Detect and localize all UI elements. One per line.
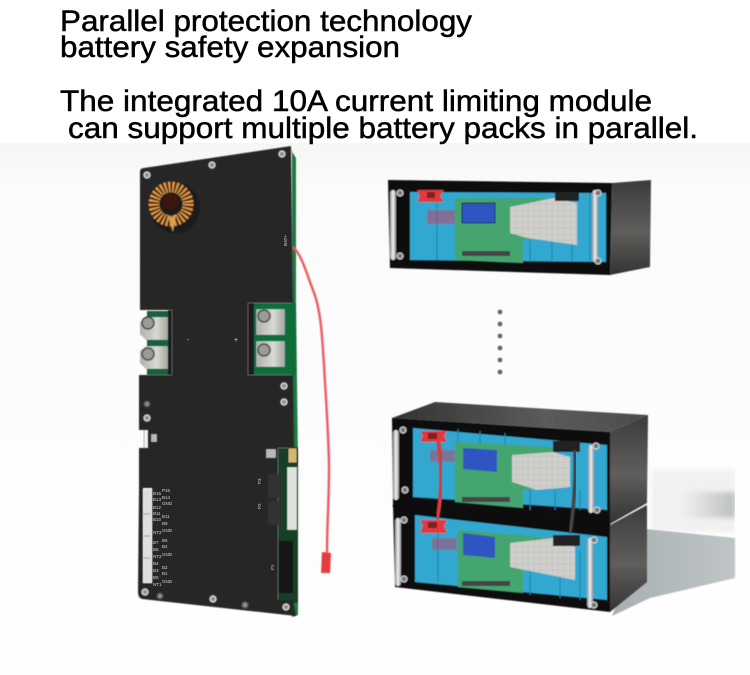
title: Parallel protection technology (60, 5, 472, 38)
small board labels: B7 (153, 540, 159, 545)
handles (393, 430, 399, 500)
power terminals (140, 309, 285, 369)
small board labels: P1 (270, 564, 275, 570)
black board cover (138, 146, 296, 616)
small board labels: B13 (153, 497, 162, 502)
red terminal (420, 520, 447, 533)
heatsink (510, 198, 577, 245)
small board labels: B14 (162, 495, 171, 500)
BMS circuit board (138, 146, 298, 617)
small board labels: GND (162, 579, 173, 584)
small board labels: NT2 (153, 530, 162, 535)
board green edge (147, 150, 298, 617)
blue cells (410, 192, 606, 262)
black terminal (555, 192, 579, 201)
small board labels: - (187, 337, 190, 344)
terminal strip (462, 251, 510, 256)
small board labels: B2 (162, 565, 168, 570)
green control board (455, 442, 553, 508)
upper battery pack (388, 180, 651, 275)
mounting screws (142, 151, 289, 610)
small board labels: B11 (162, 514, 170, 519)
small board labels: GND (162, 552, 173, 557)
small board labels: B9 (162, 521, 168, 526)
title (60, 5, 472, 64)
small board labels: B11 (153, 511, 161, 516)
side panel (610, 415, 648, 524)
LCD screen (463, 448, 497, 472)
red power cable (437, 441, 441, 519)
small board labels: B1 (162, 571, 168, 576)
blue cells (415, 515, 607, 600)
front frame (388, 180, 612, 275)
handles (395, 518, 401, 586)
handles (390, 190, 396, 260)
terminal strip (462, 497, 510, 502)
black power cable (570, 450, 575, 533)
photo background panel (0, 143, 750, 675)
green control board (458, 530, 553, 593)
small board labels: B4 (153, 561, 159, 566)
small board labels: B3 (153, 568, 159, 573)
small board labels: B6 (162, 538, 168, 543)
small board labels: B12 (153, 505, 162, 510)
red dashed parallel line (430, 198, 432, 430)
LCD screen (462, 203, 495, 223)
middle battery pack (392, 402, 648, 525)
title: battery safety expansion (60, 31, 400, 64)
small board labels: P2 (257, 503, 262, 509)
description: The integrated 10A current limiting module (60, 85, 652, 118)
parallel connection dots (498, 310, 502, 374)
heatsink (512, 452, 570, 490)
small board labels: NT1 (153, 582, 162, 587)
white balance connectors (143, 489, 152, 583)
small board labels: + (234, 337, 238, 344)
heatsink (510, 538, 575, 580)
top face (392, 402, 648, 432)
black terminal (553, 441, 580, 452)
red terminal (417, 190, 444, 202)
description: can support multiple battery packs in parallel. (68, 112, 698, 145)
small board labels: B15 (153, 491, 162, 496)
right side connectors (144, 430, 297, 593)
ground shadow (612, 470, 750, 616)
small board labels: P16 (162, 488, 171, 493)
side panel (610, 180, 651, 275)
small board labels: P3 (257, 478, 262, 484)
toroid inductor (150, 183, 200, 233)
small board labels: B0 (153, 575, 159, 580)
LCD screen (463, 533, 495, 558)
small board labels: GND (162, 528, 173, 533)
small board labels: NT2 (153, 554, 162, 559)
black terminal (553, 535, 580, 546)
small board labels: BAT+ (283, 235, 288, 246)
front frame (392, 418, 610, 525)
red wire with connector (293, 247, 331, 573)
lower battery pack (393, 505, 647, 612)
small board labels: B10 (153, 517, 162, 522)
black dashed parallel line (566, 190, 568, 432)
front frame (393, 505, 610, 612)
small board labels: B5 (153, 547, 159, 552)
blue cells (413, 428, 607, 510)
small board labels: B4 (162, 544, 168, 549)
description (60, 85, 698, 145)
red terminal (420, 431, 447, 442)
small board labels (153, 235, 288, 587)
terminal strip (462, 581, 510, 586)
small board labels: GND (162, 501, 173, 506)
side panel (610, 505, 647, 612)
green control board (455, 198, 553, 263)
